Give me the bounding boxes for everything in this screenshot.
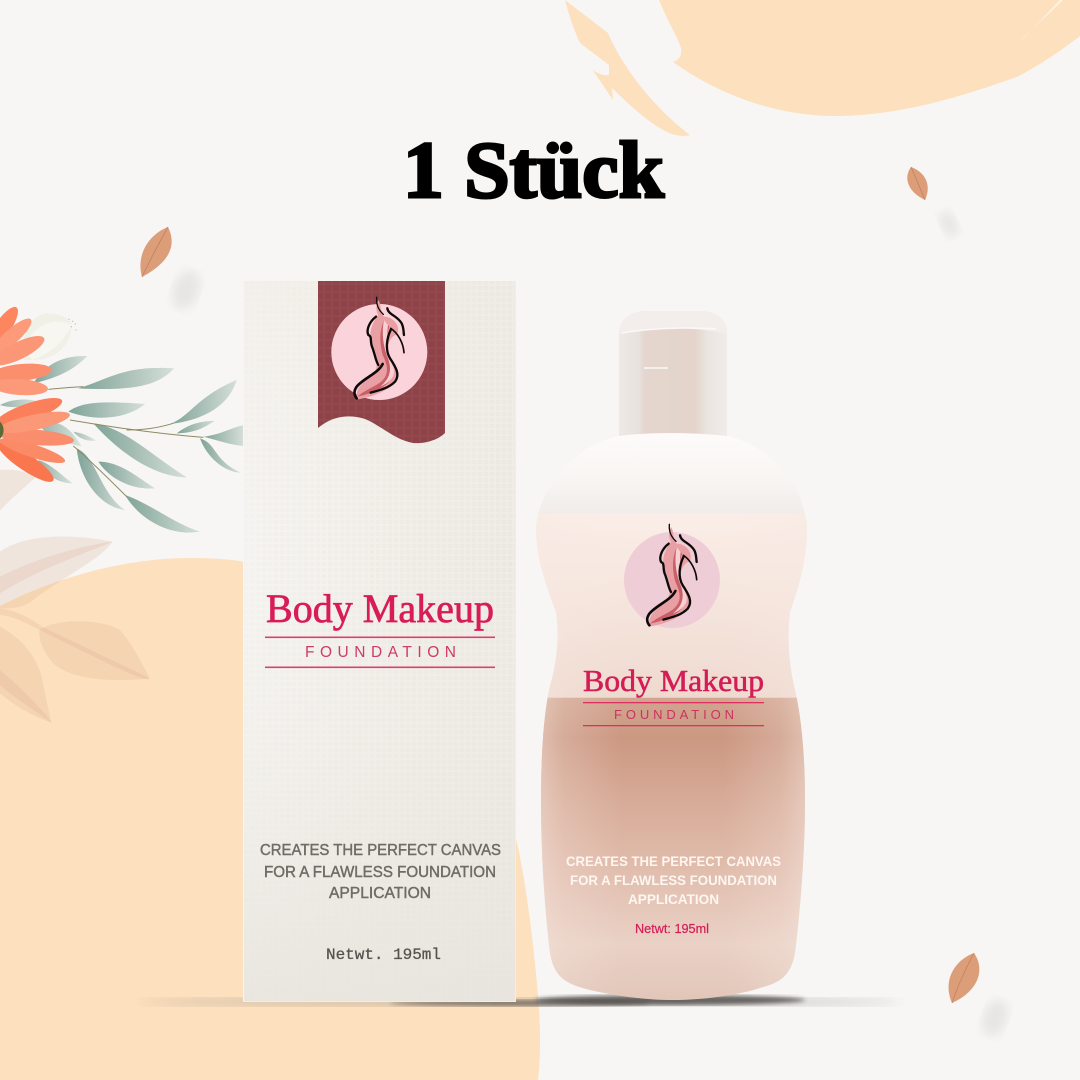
bottle description: APPLICATION (628, 891, 719, 907)
box description: CREATES THE PERFECT CANVAS (260, 842, 501, 859)
orange flower, lower (0, 392, 75, 488)
box ribbon with logo (318, 281, 445, 443)
box brand name (265, 586, 495, 668)
bottle brand name: FOUNDATION (614, 707, 734, 722)
green leaves (0, 356, 243, 533)
box brand name: Body Makeup (266, 586, 494, 631)
box description: APPLICATION (329, 885, 431, 902)
bottle net weight: Netwt: 195ml (635, 921, 709, 936)
stems (48, 387, 203, 497)
product box (243, 281, 516, 1002)
box net weight: Netwt. 195ml (326, 946, 441, 964)
bottle body (530, 430, 815, 1003)
box description (260, 842, 501, 902)
bottle description: FOR A FLAWLESS FOUNDATION (570, 872, 777, 888)
floor shadow (140, 995, 900, 1006)
background blob: top right peach (565, 0, 1080, 136)
title: 1 Stück (403, 125, 664, 215)
orange flower, upper (0, 303, 52, 397)
bottle logo (624, 524, 720, 628)
floral branch illustration (0, 303, 243, 723)
decorative falling leaf, upper left (140, 227, 205, 313)
bottle brand name (583, 663, 764, 726)
box description: FOR A FLAWLESS FOUNDATION (264, 864, 496, 881)
white bud (23, 313, 77, 360)
decorative falling leaf, lower right (949, 953, 1013, 1040)
ghost leaves (0, 470, 150, 723)
bottle cap (619, 311, 727, 438)
product bottle (530, 311, 815, 1003)
bottle description (566, 853, 781, 907)
bottle description: CREATES THE PERFECT CANVAS (566, 853, 781, 869)
background blob: bottom left peach (0, 558, 540, 1080)
box brand name: FOUNDATION (305, 644, 456, 661)
bottle brand name: Body Makeup (583, 663, 764, 698)
decorative falling leaf, upper right (907, 167, 962, 240)
